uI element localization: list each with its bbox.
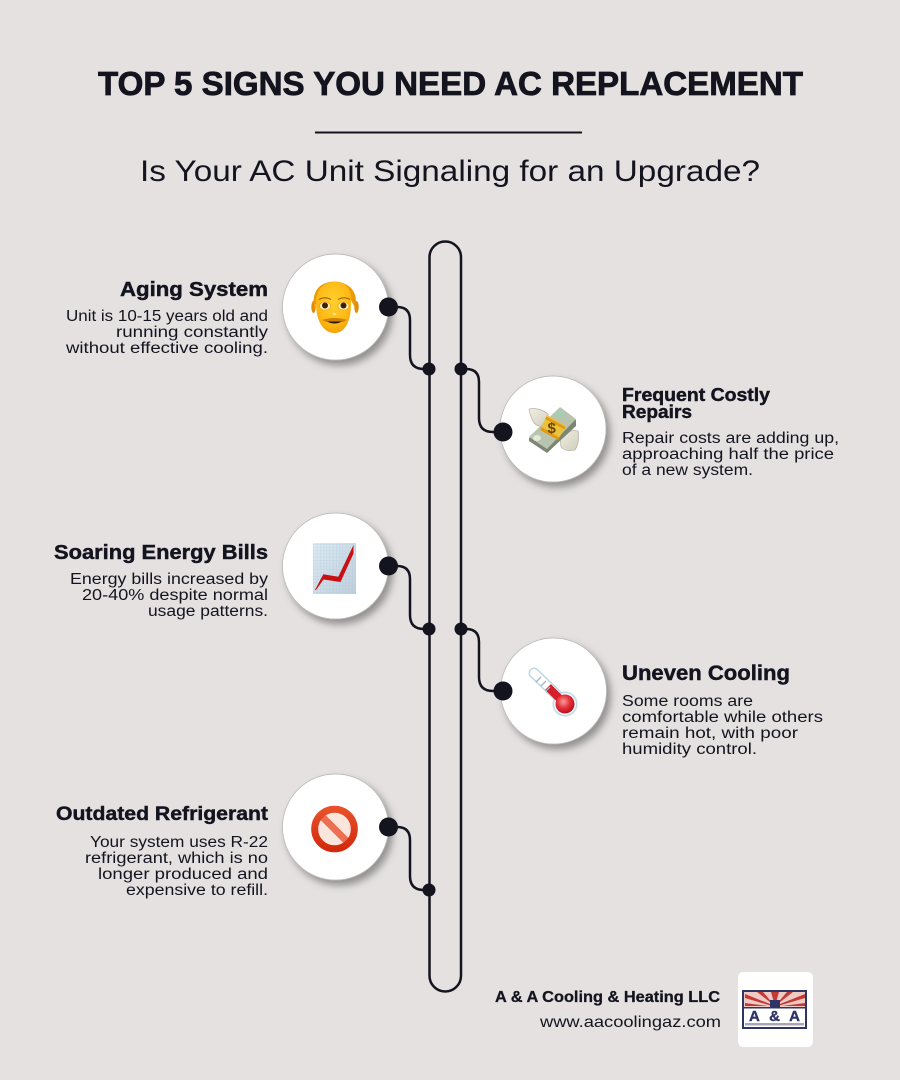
repairs text: of a new system. <box>622 462 753 479</box>
uneven cooling text: remain hot, with poor <box>622 725 798 742</box>
refrigerant text: refrigerant, which is no <box>85 850 268 867</box>
repairs text: Frequent Costly <box>622 384 771 405</box>
aging system text: Aging System <box>120 279 268 301</box>
energy bills text: usage patterns. <box>148 603 268 620</box>
footer: company name and website <box>495 989 721 1031</box>
panel: soaring energy bills <box>54 513 436 636</box>
panel: frequent costly repairs <box>454 362 839 482</box>
icon circle: energy bills <box>282 513 388 619</box>
panel: aging system <box>65 254 436 376</box>
icon circle: aging system <box>282 254 388 360</box>
uneven cooling text: Uneven Cooling <box>622 662 790 685</box>
refrigerant text <box>56 803 269 899</box>
footer: company name and website: A & A Cooling & Heating LLC <box>495 989 720 1006</box>
energy bills text: Soaring Energy Bills <box>54 542 268 564</box>
energy bills text <box>54 542 268 620</box>
icon: prohibited sign <box>315 809 354 849</box>
central timeline track <box>430 242 461 992</box>
title: TOP 5 SIGNS YOU NEED AC REPLACEMENT <box>98 65 803 102</box>
panel: uneven cooling <box>454 622 823 758</box>
connector: uneven cooling <box>454 622 512 700</box>
repairs text: Repairs <box>622 401 692 422</box>
icon: older man <box>311 282 359 333</box>
icon: thermometer <box>534 673 578 716</box>
icon circle: refrigerant <box>282 774 388 880</box>
connector: refrigerant <box>379 818 436 896</box>
connector: energy bills <box>379 556 436 636</box>
icon: money with wings <box>529 407 579 453</box>
footer: company name and website: www.aacoolingaz.com <box>539 1014 721 1031</box>
uneven cooling text: humidity control. <box>622 741 757 758</box>
company logo: A&A <box>749 1008 800 1025</box>
repairs text: approaching half the price <box>622 446 834 463</box>
connector: repairs <box>454 362 512 442</box>
uneven cooling text <box>622 662 823 758</box>
repairs text: Repair costs are adding up, <box>622 430 839 447</box>
company logo <box>738 972 813 1047</box>
icon: money with wings: $ <box>548 420 556 437</box>
uneven cooling text: Some rooms are <box>622 693 753 710</box>
refrigerant text: expensive to refill. <box>126 882 268 899</box>
aging system text: Unit is 10-15 years old and <box>66 308 268 325</box>
title divider <box>315 132 582 134</box>
icon circle: uneven cooling <box>500 638 606 744</box>
subtitle: Is Your AC Unit Signaling for an Upgrade? <box>140 155 760 188</box>
panel: outdated refrigerant <box>56 774 436 899</box>
icon circle: repairs <box>500 376 606 482</box>
aging system text: running constantly <box>116 324 268 341</box>
refrigerant text: longer produced and <box>98 866 268 883</box>
energy bills text: Energy bills increased by <box>70 571 268 588</box>
connector: aging system <box>379 298 436 376</box>
icon: rising chart <box>313 543 356 594</box>
repairs text <box>622 384 839 479</box>
refrigerant text: Your system uses R-22 <box>90 834 268 851</box>
uneven cooling text: comfortable while others <box>622 709 823 726</box>
energy bills text: 20-40% despite normal <box>82 587 268 604</box>
refrigerant text: Outdated Refrigerant <box>56 803 269 825</box>
aging system text <box>65 279 268 357</box>
aging system text: without effective cooling. <box>65 340 268 357</box>
